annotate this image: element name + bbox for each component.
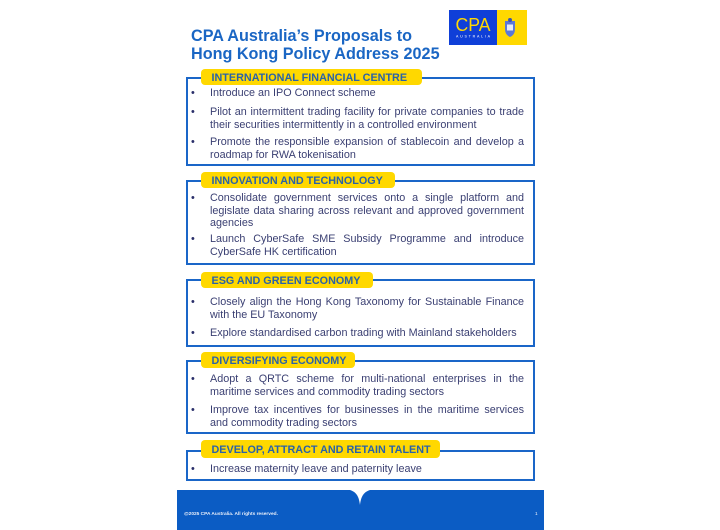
text: international financial centre bullets: Introduce an IPO Connect scheme (210, 86, 376, 98)
panel: international financial centre (186, 77, 535, 166)
title: CPA Australia’s Proposals to (191, 26, 412, 44)
panel: ESG and green economy (186, 279, 535, 347)
heading: ESG and green economy (201, 272, 373, 288)
heading: diversifying economy: DIVERSIFYING ECONOMY (212, 355, 346, 367)
page number: 1 (535, 512, 538, 517)
title: Hong Kong Policy Address 2025 (191, 44, 440, 62)
text: diversifying economy bullets: • (191, 372, 195, 384)
text: diversifying economy bullets: maritime services and commodity trading sectors (210, 386, 444, 398)
heading: international financial centre: INTERNATIONAL FINANCIAL CENTRE (212, 72, 407, 84)
heading: develop, attract and retain talent: DEVELOP, ATTRACT AND RETAIN TALENT (212, 444, 431, 456)
text: international financial centre bullets: • (191, 106, 195, 118)
text: ESG and green economy bullets: with the EU Taxonomy (210, 308, 317, 320)
text: diversifying economy bullets (191, 372, 524, 428)
logo: CPA Australia (449, 10, 527, 45)
text: innovation and technology bullets: Launch CyberSafe SME Subsidy Programme and introduce (210, 232, 524, 244)
logo: CPA Australia: AUSTRALIA (456, 34, 491, 38)
text: ESG and green economy bullets: Closely align the Hong Kong Taxonomy for Sustainable Finance (210, 296, 524, 308)
text: international financial centre bullets: Promote the responsible expansion of stablecoin and develop a (210, 136, 524, 148)
text: develop, attract and retain talent bullet: Increase maternity leave and paternity leave (210, 462, 422, 474)
panel: develop, attract and retain talent (186, 450, 535, 481)
text: international financial centre bullets: their securities intermittently in a controlled environment (210, 118, 476, 130)
text: diversifying economy bullets: and commodity trading sectors (210, 416, 357, 428)
text: diversifying economy bullets: Adopt a QRTC scheme for multi-national enterprises in the (210, 372, 524, 384)
heading: international financial centre (201, 69, 422, 85)
heading: develop, attract and retain talent (201, 440, 440, 458)
footer band (177, 490, 544, 530)
text: innovation and technology bullets: • (191, 232, 195, 244)
text: international financial centre bullets: roadmap for RWA tokenisation (210, 148, 356, 160)
text: diversifying economy bullets: • (191, 404, 195, 416)
text: ESG and green economy bullets: • (191, 296, 195, 308)
text: develop, attract and retain talent bullet: • (191, 462, 195, 474)
copyright: @2025 CPA Australia. All rights reserved. (184, 512, 278, 517)
panel: diversifying economy (186, 360, 535, 434)
text: ESG and green economy bullets: Explore standardised carbon trading with Mainland stakeholders (210, 326, 517, 338)
text: innovation and technology bullets: Consolidate government services onto a single platform and (210, 192, 524, 204)
text: international financial centre bullets: Pilot an intermittent trading facility for private companies to trade (210, 106, 524, 118)
text: international financial centre bullets: • (191, 136, 195, 148)
heading: ESG and green economy: ESG AND GREEN ECONOMY (212, 275, 360, 287)
text: ESG and green economy bullets: • (191, 326, 195, 338)
text: innovation and technology bullets: legislate data sharing across relevant and approved government (210, 204, 524, 216)
text: innovation and technology bullets (191, 192, 524, 258)
title (191, 26, 440, 62)
panel: innovation and technology (186, 180, 535, 265)
text: innovation and technology bullets: CyberSafe HK certification (210, 246, 337, 258)
text: innovation and technology bullets: • (191, 192, 195, 204)
text: international financial centre bullets: • (191, 86, 195, 98)
text: diversifying economy bullets: Improve tax incentives for businesses in the maritime services (210, 404, 524, 416)
heading: diversifying economy (201, 352, 355, 368)
heading: innovation and technology (201, 172, 395, 188)
text: innovation and technology bullets: agencies (210, 216, 253, 228)
notch (350, 490, 370, 505)
text: ESG and green economy bullets (191, 296, 524, 338)
logo: CPA Australia: CPA (456, 15, 490, 35)
text: international financial centre bullets (191, 86, 524, 160)
heading: innovation and technology: INNOVATION AND TECHNOLOGY (212, 175, 383, 187)
